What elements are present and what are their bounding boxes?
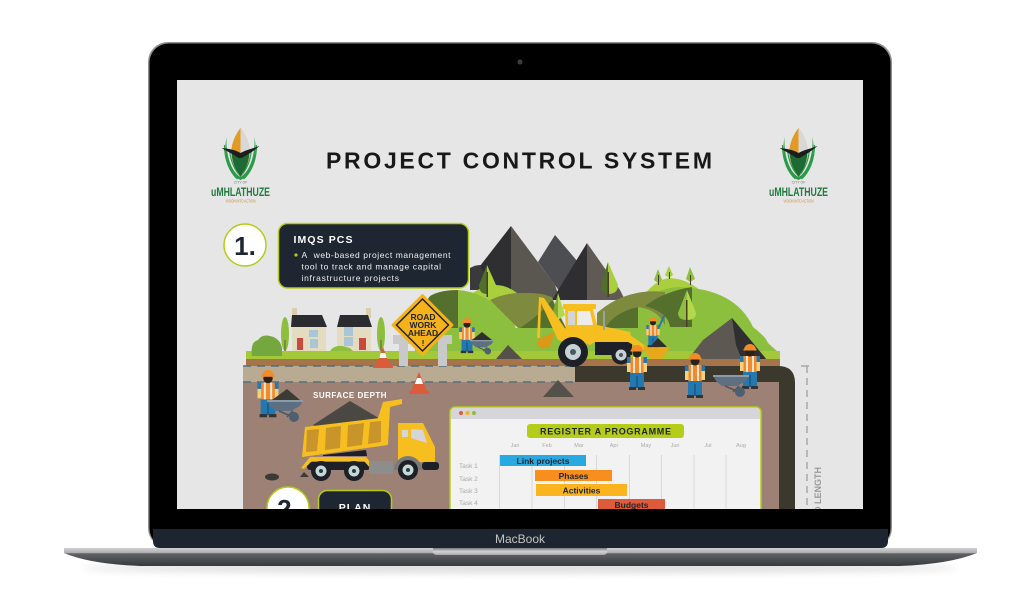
task labels: Task 3 <box>459 488 478 495</box>
road <box>243 366 575 382</box>
bar: phases: Phases <box>559 471 589 481</box>
month labels: Jul <box>704 443 712 449</box>
worker centre right <box>685 353 705 398</box>
gantt panel <box>450 407 761 517</box>
logo left <box>211 128 270 204</box>
window title bar <box>451 408 760 419</box>
loose rocks <box>265 472 309 480</box>
mountains <box>470 226 625 300</box>
month labels <box>510 443 746 448</box>
task labels: Task 1 <box>459 463 478 470</box>
bar: phases <box>535 470 612 481</box>
month labels: Aug <box>736 443 746 449</box>
traffic cone lower <box>409 372 429 394</box>
worker on hill <box>646 316 667 347</box>
title: PROJECT CONTROL SYSTEM <box>326 148 712 174</box>
bar: link projects <box>500 455 586 466</box>
worker with wheelbarrow left <box>258 370 303 422</box>
laptop lid and bezel <box>148 42 892 548</box>
road sign: ROAD <box>410 312 436 322</box>
month labels: May <box>641 443 651 449</box>
road sign: WORK <box>410 320 437 330</box>
screen content <box>177 80 863 540</box>
task labels: Task 4 <box>459 500 478 507</box>
register a programme heading <box>527 424 684 438</box>
month labels: Jan <box>511 443 519 449</box>
month labels: Jun <box>671 443 679 449</box>
trees <box>479 262 696 327</box>
front wheel <box>612 350 630 364</box>
bar: activities <box>536 484 627 496</box>
step 2 callout: PLAN <box>339 502 371 514</box>
laptop shadow <box>80 563 960 573</box>
laptop base <box>64 548 977 566</box>
logo right <box>769 128 828 204</box>
rear wheel <box>558 337 588 367</box>
callout bullet text: infrastructure projects <box>302 273 399 283</box>
small rock piles <box>496 345 574 397</box>
dump truck <box>301 399 439 481</box>
month labels: Apr <box>610 443 618 449</box>
month labels: Feb <box>542 443 552 449</box>
month labels: Mar <box>574 443 584 449</box>
callout heading: IMQS PCS <box>294 234 352 246</box>
callout bullet text <box>294 250 451 283</box>
step 2 number badge: 2. <box>277 494 299 524</box>
webcam <box>518 60 522 64</box>
keyboard chin with MacBook label: MacBook <box>495 532 546 546</box>
surface depth label: SURFACE DEPTH <box>313 391 387 400</box>
callout bullet text: tool to track and manage capital <box>302 262 441 272</box>
backhoe loader <box>537 297 670 367</box>
step 1 number badge: 1. <box>234 231 256 261</box>
worker centre left <box>627 345 647 390</box>
traffic cone upper <box>373 347 393 368</box>
step 2 callout <box>318 490 392 509</box>
hills <box>246 278 780 359</box>
step 2 number badge <box>266 486 310 509</box>
step 1 callout <box>278 224 468 288</box>
road sign: ! <box>422 338 425 348</box>
worker with wheelbarrow right <box>713 344 760 397</box>
bar: link projects: Link projects <box>517 456 570 466</box>
big rock pile <box>688 318 766 359</box>
ground layers and right edge <box>243 359 795 509</box>
worker with wheelbarrow by the sign <box>459 318 494 355</box>
bar: budgets <box>598 499 665 511</box>
task labels <box>459 463 478 507</box>
bar: budgets: Budgets <box>614 500 649 510</box>
task labels: Task 2 <box>459 476 478 483</box>
register a programme heading: REGISTER A PROGRAMME <box>540 426 671 436</box>
callout bullet text: A web-based project management <box>302 250 451 260</box>
road length dimension: ROAD LENGTH <box>813 467 823 533</box>
road sign <box>392 295 452 366</box>
road sign: AHEAD <box>408 328 438 338</box>
keyboard chin with MacBook label <box>153 529 888 548</box>
step 1 number badge <box>224 224 266 266</box>
bar: activities: Activities <box>563 486 601 496</box>
houses and garden <box>252 308 385 356</box>
